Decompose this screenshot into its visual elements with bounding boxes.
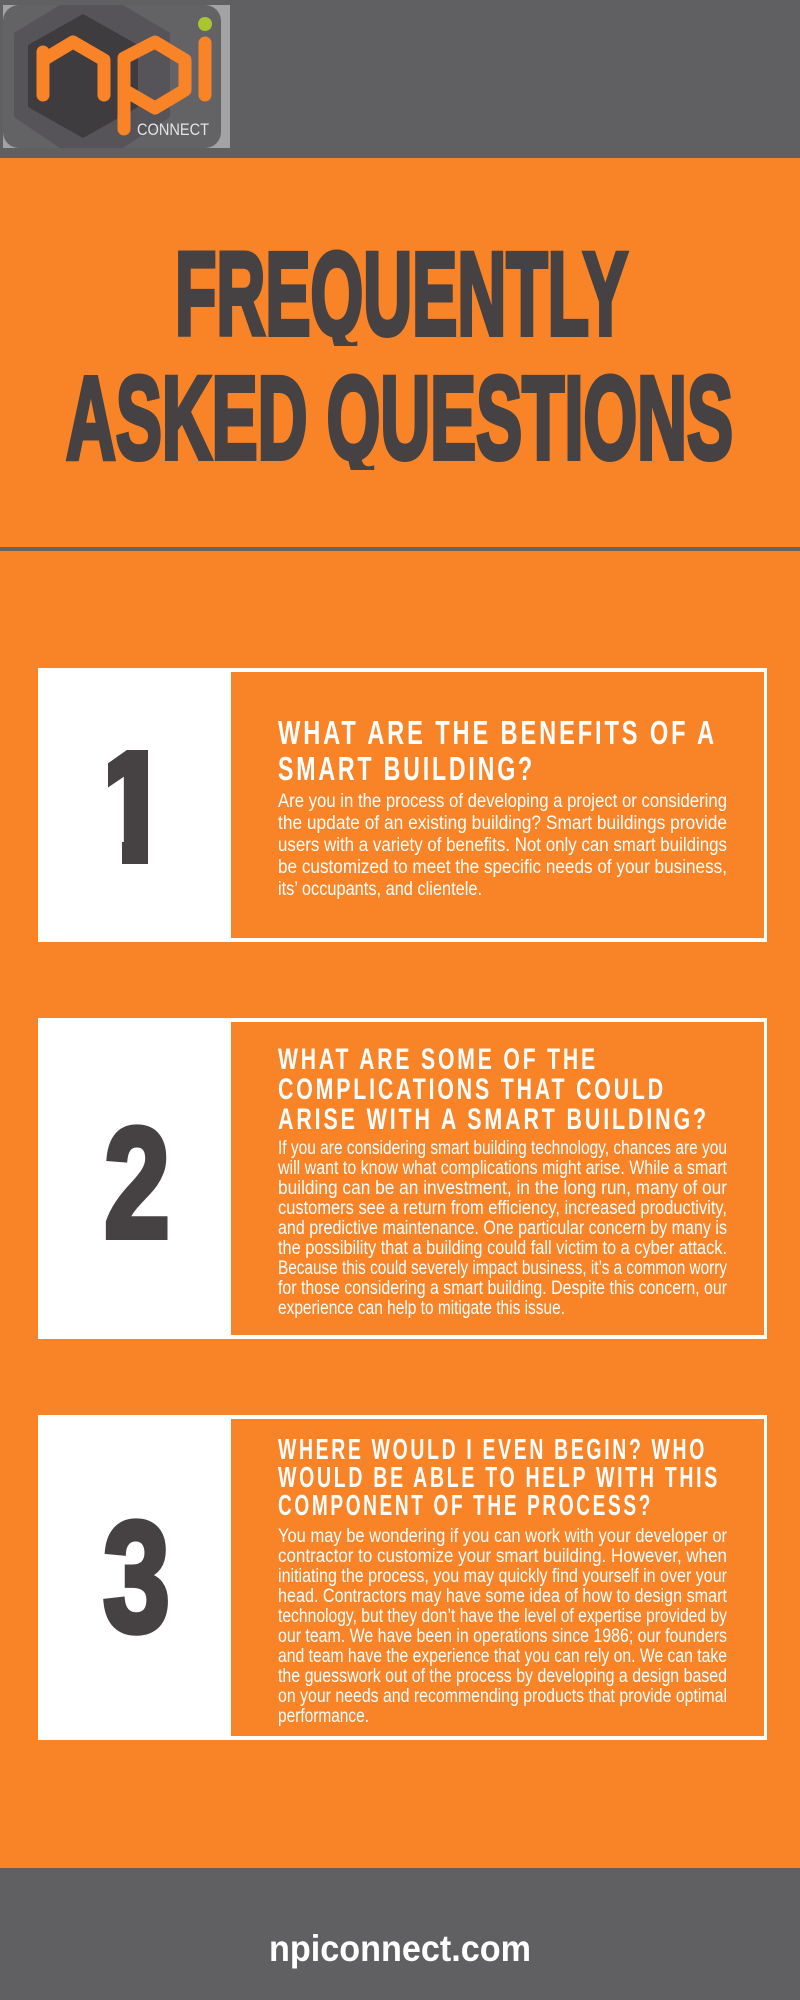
answer 2: customers see a return from efficiency, increased productivity, (278, 1198, 727, 1219)
panel: question 2 (38, 1018, 767, 1339)
answer 1: the update of an existing building? Smart buildings provide (278, 813, 727, 834)
answer 1: users with a variety of benefits. Not only can smart buildings (278, 835, 727, 856)
panel: question 3 (38, 1415, 767, 1740)
heading: question 1 (278, 714, 717, 787)
answer 3 (278, 1526, 728, 1727)
answer 3: contractor to customize your smart building. However, when (278, 1546, 727, 1567)
logo: npi connect: CONNECT (137, 120, 209, 139)
heading: question 1: SMART BUILDING? (278, 750, 535, 787)
header band (0, 0, 800, 158)
heading: question 2: WHAT ARE SOME OF THE (278, 1043, 598, 1076)
answer 3: You may be wondering if you can work with your developer or (278, 1526, 728, 1547)
title (66, 250, 732, 470)
heading: question 2 (278, 1043, 709, 1136)
answer 2: will want to know what complications might arise. While a smart (277, 1158, 728, 1179)
answer 3: our team. We have been in operations since 1986; our founders (278, 1626, 727, 1647)
answer 2: for those considering a smart building. Despite this concern, our (278, 1278, 728, 1299)
answer 2 (277, 1138, 728, 1319)
answer 3: head. Contractors may have some idea of how to design smart (278, 1586, 728, 1607)
footer url: npiconnect.com (269, 1928, 531, 1969)
panel: question 1 (38, 668, 767, 942)
answer 1: be customized to meet the specific needs of your business, (278, 857, 727, 878)
heading: question 3 (278, 1434, 720, 1522)
number 2: 2 (104, 1096, 170, 1271)
answer 2: and predictive maintenance. One particular concern by many is (278, 1218, 727, 1239)
answer 3: initiating the process, you may quickly find yourself in over your (278, 1566, 728, 1587)
number 1: 1 (93, 720, 173, 895)
answer 3: performance. (278, 1706, 369, 1727)
answer 1 (278, 791, 727, 900)
answer 2: experience can help to mitigate this issue. (278, 1298, 565, 1319)
footer band (0, 1868, 800, 2000)
answer 2: the possibility that a building could fall victim to a cyber attack. (278, 1238, 727, 1259)
answer 3: on your needs and recommending products that provide optimal (278, 1686, 727, 1707)
answer 1: Are you in the process of developing a project or considering (278, 791, 727, 812)
answer 1: its’ occupants, and clientele. (278, 879, 482, 900)
number 3: 3 (103, 1490, 170, 1665)
logo: npi connect (3, 5, 230, 148)
answer 3: the guesswork out of the process by developing a design based (278, 1666, 727, 1687)
answer 2: building can be an investment, in the long run, many of our (278, 1178, 728, 1199)
